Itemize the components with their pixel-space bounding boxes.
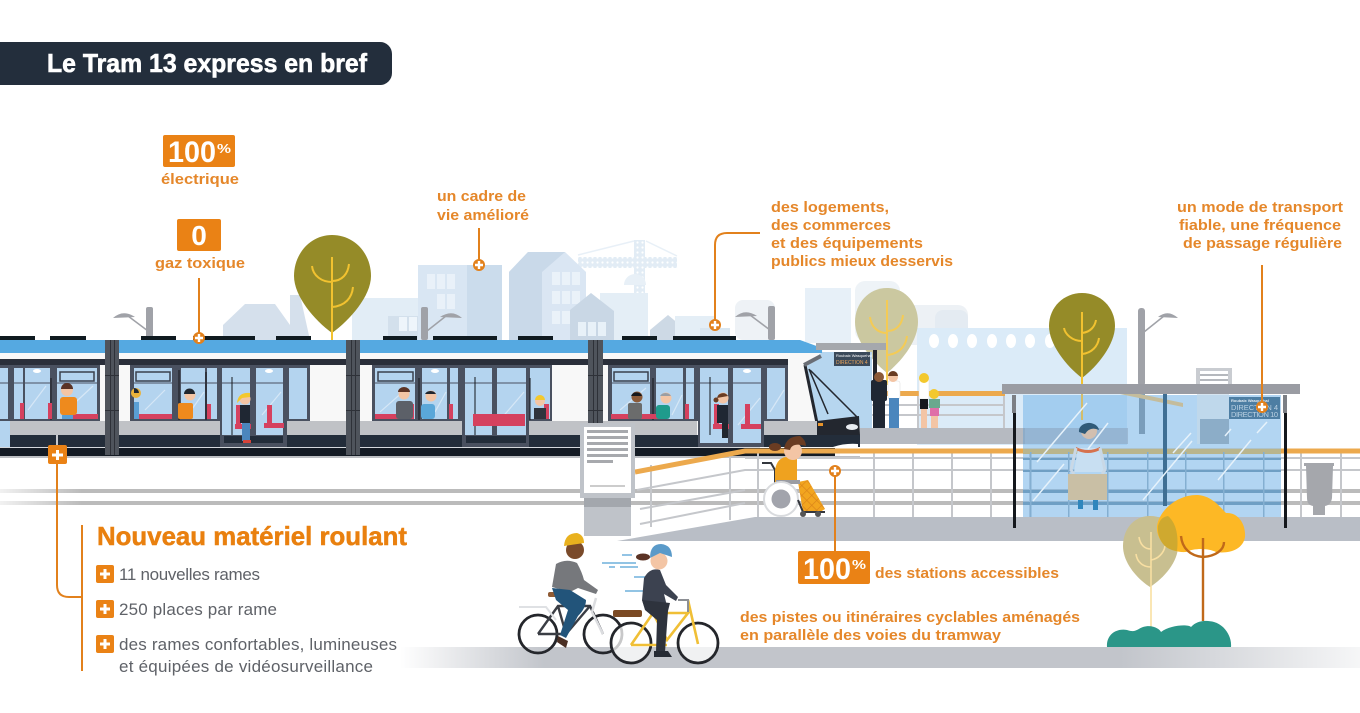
roof and posts [1002, 384, 1300, 394]
callout: logements: publics mieux desservis [771, 253, 953, 270]
callout: 100% électrique [161, 135, 239, 188]
marker: cadre de vie [473, 228, 485, 271]
speed lines [602, 555, 646, 591]
seats [20, 403, 761, 429]
callout: stations accessibles: 100 [803, 553, 851, 586]
callout: 100% électrique: 100 [168, 136, 216, 169]
info totem [580, 423, 635, 536]
glass glints [1033, 403, 1267, 501]
list: features: et équipées de vidéosurveillance [119, 657, 373, 676]
title banner: Le Tram 13 express en bref [47, 48, 367, 78]
callout: 100% électrique: % [217, 141, 232, 156]
trees and bush bottom right [1107, 495, 1245, 647]
dark skirt [0, 435, 860, 447]
callout: mode de transport: un mode de transport [1177, 199, 1343, 216]
body [0, 340, 840, 456]
tram [0, 336, 886, 458]
tram nose [817, 416, 860, 435]
lower platform [617, 517, 1360, 541]
main railing [635, 451, 1360, 527]
callout: 100% électrique: électrique [161, 171, 239, 188]
list: features: 250 places par rame [119, 600, 277, 619]
glass [1023, 395, 1281, 517]
title banner [0, 42, 392, 85]
callout: mode de transport: fiable, une fréquence [1179, 217, 1341, 234]
grey lower band [10, 421, 818, 435]
shelter [1002, 368, 1300, 528]
window panes [0, 368, 785, 419]
street lamps [113, 306, 1178, 386]
far platform and railing [845, 391, 1025, 444]
callout: 0 gaz toxique: gaz toxique [155, 255, 245, 272]
marker: logements [709, 233, 760, 331]
callout: logements: des commerces [771, 217, 891, 234]
callout: pistes cyclables: en parallèle des voies du tramway [740, 627, 1002, 644]
direction sign: DIRECTION 10 [1231, 410, 1278, 419]
callout: stations accessibles: des stations accessibles [875, 565, 1059, 582]
connector: nouveau matériel [48, 435, 82, 671]
list: features: des rames confortables, lumineuses [119, 635, 397, 654]
direction sign [1229, 397, 1280, 419]
tram stop roof and sign: DIRECTION 4 [836, 360, 868, 366]
doors [0, 365, 764, 447]
callout: mode de transport: de passage régulière [1183, 235, 1342, 252]
callout: logements: et des équipements [771, 235, 923, 252]
callout: pistes cyclables: des pistes ou itinéraires cyclables aménagés [740, 609, 1080, 626]
callout: stations accessibles [798, 465, 1059, 586]
callout: logements [771, 199, 953, 270]
list: features [96, 565, 397, 676]
windshield and stop glass behind [807, 352, 872, 428]
direction sign: DIRECTION 4 [1231, 403, 1278, 412]
waste bin [1304, 463, 1334, 515]
tram stop roof and sign [816, 343, 886, 380]
heading: nouveau matériel roulant: Nouveau matériel roulant [97, 521, 407, 551]
articulations [105, 340, 603, 455]
city skyline background [223, 240, 1127, 445]
callout: 0 gaz toxique: 0 [191, 220, 207, 251]
callout: pistes cyclables [740, 609, 1080, 644]
wheelchair user [762, 436, 825, 517]
tracks [0, 489, 1360, 505]
passengers in tram [60, 383, 728, 443]
bottom ground strip [400, 647, 1360, 668]
tree left [294, 235, 371, 340]
marker: transport [1256, 265, 1268, 413]
direction sign: Roubaix Wasquehal [1231, 398, 1269, 403]
list: features: 11 nouvelles rames [119, 565, 260, 584]
callout: cadre de vie second line: vie amélioré [437, 207, 529, 224]
callout: mode de transport [1177, 199, 1343, 252]
callout: cadre de vie: un cadre de [437, 188, 526, 205]
pantograph dashes [0, 336, 736, 340]
cyclist with yellow bike [611, 544, 718, 663]
callout: stations accessibles: % [852, 557, 867, 572]
tree behind shelter [1049, 293, 1115, 384]
callout: logements: des logements, [771, 199, 889, 216]
callout: 0 gaz toxique [155, 219, 245, 272]
window frames [0, 365, 788, 421]
tree behind station, faded [855, 288, 918, 385]
people on far platform [871, 371, 940, 428]
window details [0, 369, 784, 435]
tram stop roof and sign: Roubaix Wasquehal [836, 353, 872, 358]
cyclist with black bike [519, 533, 622, 653]
marker: gaz toxique [193, 278, 205, 344]
person in shelter [1068, 423, 1107, 510]
